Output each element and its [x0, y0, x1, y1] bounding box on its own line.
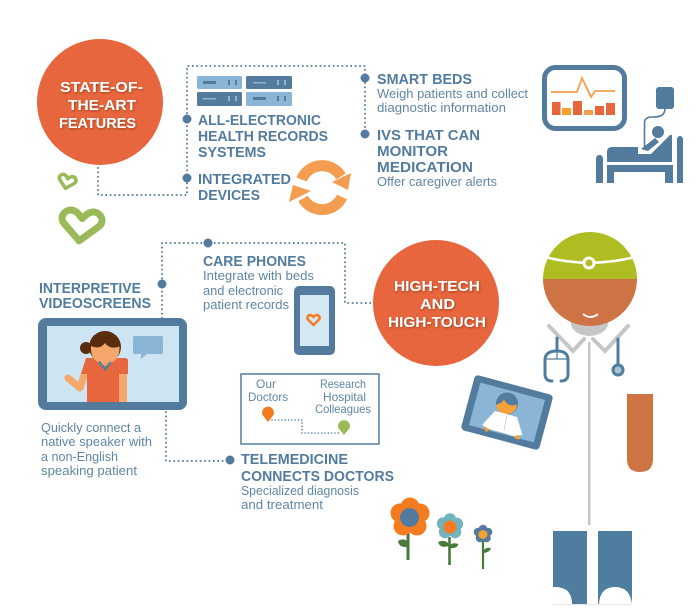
circle: state-of-the-art features: FEATURES	[59, 116, 136, 132]
text: videoscreen description: speaking patient	[41, 464, 138, 478]
circle: state-of-the-art features	[37, 39, 163, 165]
text: IVs that can monitor medication: MONITOR	[377, 144, 449, 160]
text: care phones: and electronic	[203, 284, 283, 298]
circle: high-tech and high-touch: AND	[420, 297, 455, 313]
heading: interpretive videoscreens: VIDEOSCREENS	[39, 296, 151, 312]
connector dot: care phones	[204, 238, 212, 248]
text: telemedicine connects doctors	[241, 452, 394, 512]
text: videoscreen description	[41, 421, 152, 478]
text: care phones	[203, 254, 314, 312]
text: videoscreen description: Quickly connect a	[41, 421, 141, 435]
text: IVs that can monitor medication: MEDICATION	[377, 160, 473, 176]
text: care phones: patient records	[203, 298, 289, 312]
map box: doctors to research hospital colleagues: Our	[256, 377, 276, 391]
icon: small blue flower	[474, 525, 492, 569]
dot: smart beds	[360, 74, 370, 82]
text: IVs that can monitor medication: Offer caregiver alerts	[377, 175, 497, 189]
stethoscope	[545, 338, 623, 381]
text: smart beds	[377, 72, 529, 115]
legs	[553, 531, 632, 605]
circle: high-tech and high-touch	[373, 240, 499, 366]
connector dot: telemedicine	[226, 456, 234, 464]
arm	[627, 394, 653, 472]
text: smart beds: SMART BEDS	[377, 72, 472, 88]
map box: doctors to research hospital colleagues: Colleagues	[315, 402, 371, 416]
icon: hospital bed with patient and IV	[596, 87, 683, 183]
map box: doctors to research hospital colleagues: Hospital	[323, 390, 366, 404]
text: videoscreen description: native speaker with	[41, 435, 152, 449]
circle: high-tech and high-touch: HIGH-TOUCH	[388, 315, 486, 331]
heading: all-electronic health records systems	[198, 113, 328, 161]
text: care phones: CARE PHONES	[203, 254, 306, 270]
heading: integrated devices: DEVICES	[198, 188, 260, 204]
icon: care phone	[294, 286, 335, 355]
text: care phones: Integrate with beds	[203, 269, 314, 283]
icon: small green heart	[57, 174, 77, 190]
connector: top section dotted path	[98, 66, 365, 195]
neck	[570, 308, 608, 336]
map box: doctors to research hospital colleagues: Doctors	[248, 390, 288, 404]
heading: interpretive videoscreens: INTERPRETIVE	[39, 281, 141, 297]
circle: state-of-the-art features: STATE-OF-	[60, 80, 143, 96]
heading: integrated devices: INTEGRATED	[198, 172, 291, 188]
coat collar	[549, 326, 628, 351]
coat centre seam	[588, 342, 590, 525]
heading: all-electronic health records systems: SYSTEMS	[198, 145, 266, 161]
doctor head	[543, 232, 637, 326]
text: IVs that can monitor medication: IVS THAT CAN	[377, 128, 480, 144]
map box: doctors to research hospital colleagues	[241, 374, 379, 444]
heading: interpretive videoscreens	[39, 281, 151, 312]
illustration: videoscreen with interpreter	[38, 318, 187, 410]
text: telemedicine connects doctors: TELEMEDICINE	[241, 452, 348, 468]
map box: doctors to research hospital colleagues: Research	[320, 377, 366, 391]
interpreter figure	[68, 331, 128, 402]
connector: telemedicine dotted path	[166, 412, 228, 461]
connector: middle section dotted path	[162, 243, 373, 318]
connector dot: interpretive videoscreens	[158, 280, 166, 288]
speech bubble	[133, 336, 163, 359]
circle: high-tech and high-touch: HIGH-TECH	[394, 279, 480, 295]
text: smart beds: Weigh patients and collect	[377, 87, 529, 101]
text: telemedicine connects doctors: and treatment	[241, 498, 324, 512]
dot: IVs	[360, 130, 370, 138]
heading: all-electronic health records systems: HEALTH RECORDS	[198, 129, 328, 145]
icon: tablet with remote doctor	[459, 374, 553, 454]
heading: all-electronic health records systems: ALL-ELECTRONIC	[198, 113, 322, 129]
icon: large orange flower	[390, 498, 430, 560]
icon: orange sync arrows	[289, 166, 351, 210]
icon: medium teal flower	[437, 513, 463, 565]
heading: integrated devices	[198, 172, 291, 204]
icon: server racks	[197, 76, 292, 106]
head mirror band	[547, 258, 633, 268]
dot: integrated devices	[182, 174, 192, 182]
circle: state-of-the-art features: THE-ART	[68, 98, 136, 114]
text: telemedicine connects doctors: CONNECTS DOCTORS	[241, 469, 394, 485]
text: videoscreen description: a non-English	[41, 450, 118, 464]
icon: large green heart	[60, 209, 103, 243]
text: IVs that can monitor medication	[377, 128, 497, 189]
dot: all-electronic records	[182, 114, 192, 124]
text: telemedicine connects doctors: Specialized diagnosis	[241, 484, 359, 498]
smile	[583, 314, 598, 317]
illustration: doctor	[543, 232, 653, 605]
icon: vitals monitor	[544, 68, 624, 128]
text: smart beds: diagnostic information	[377, 101, 506, 115]
